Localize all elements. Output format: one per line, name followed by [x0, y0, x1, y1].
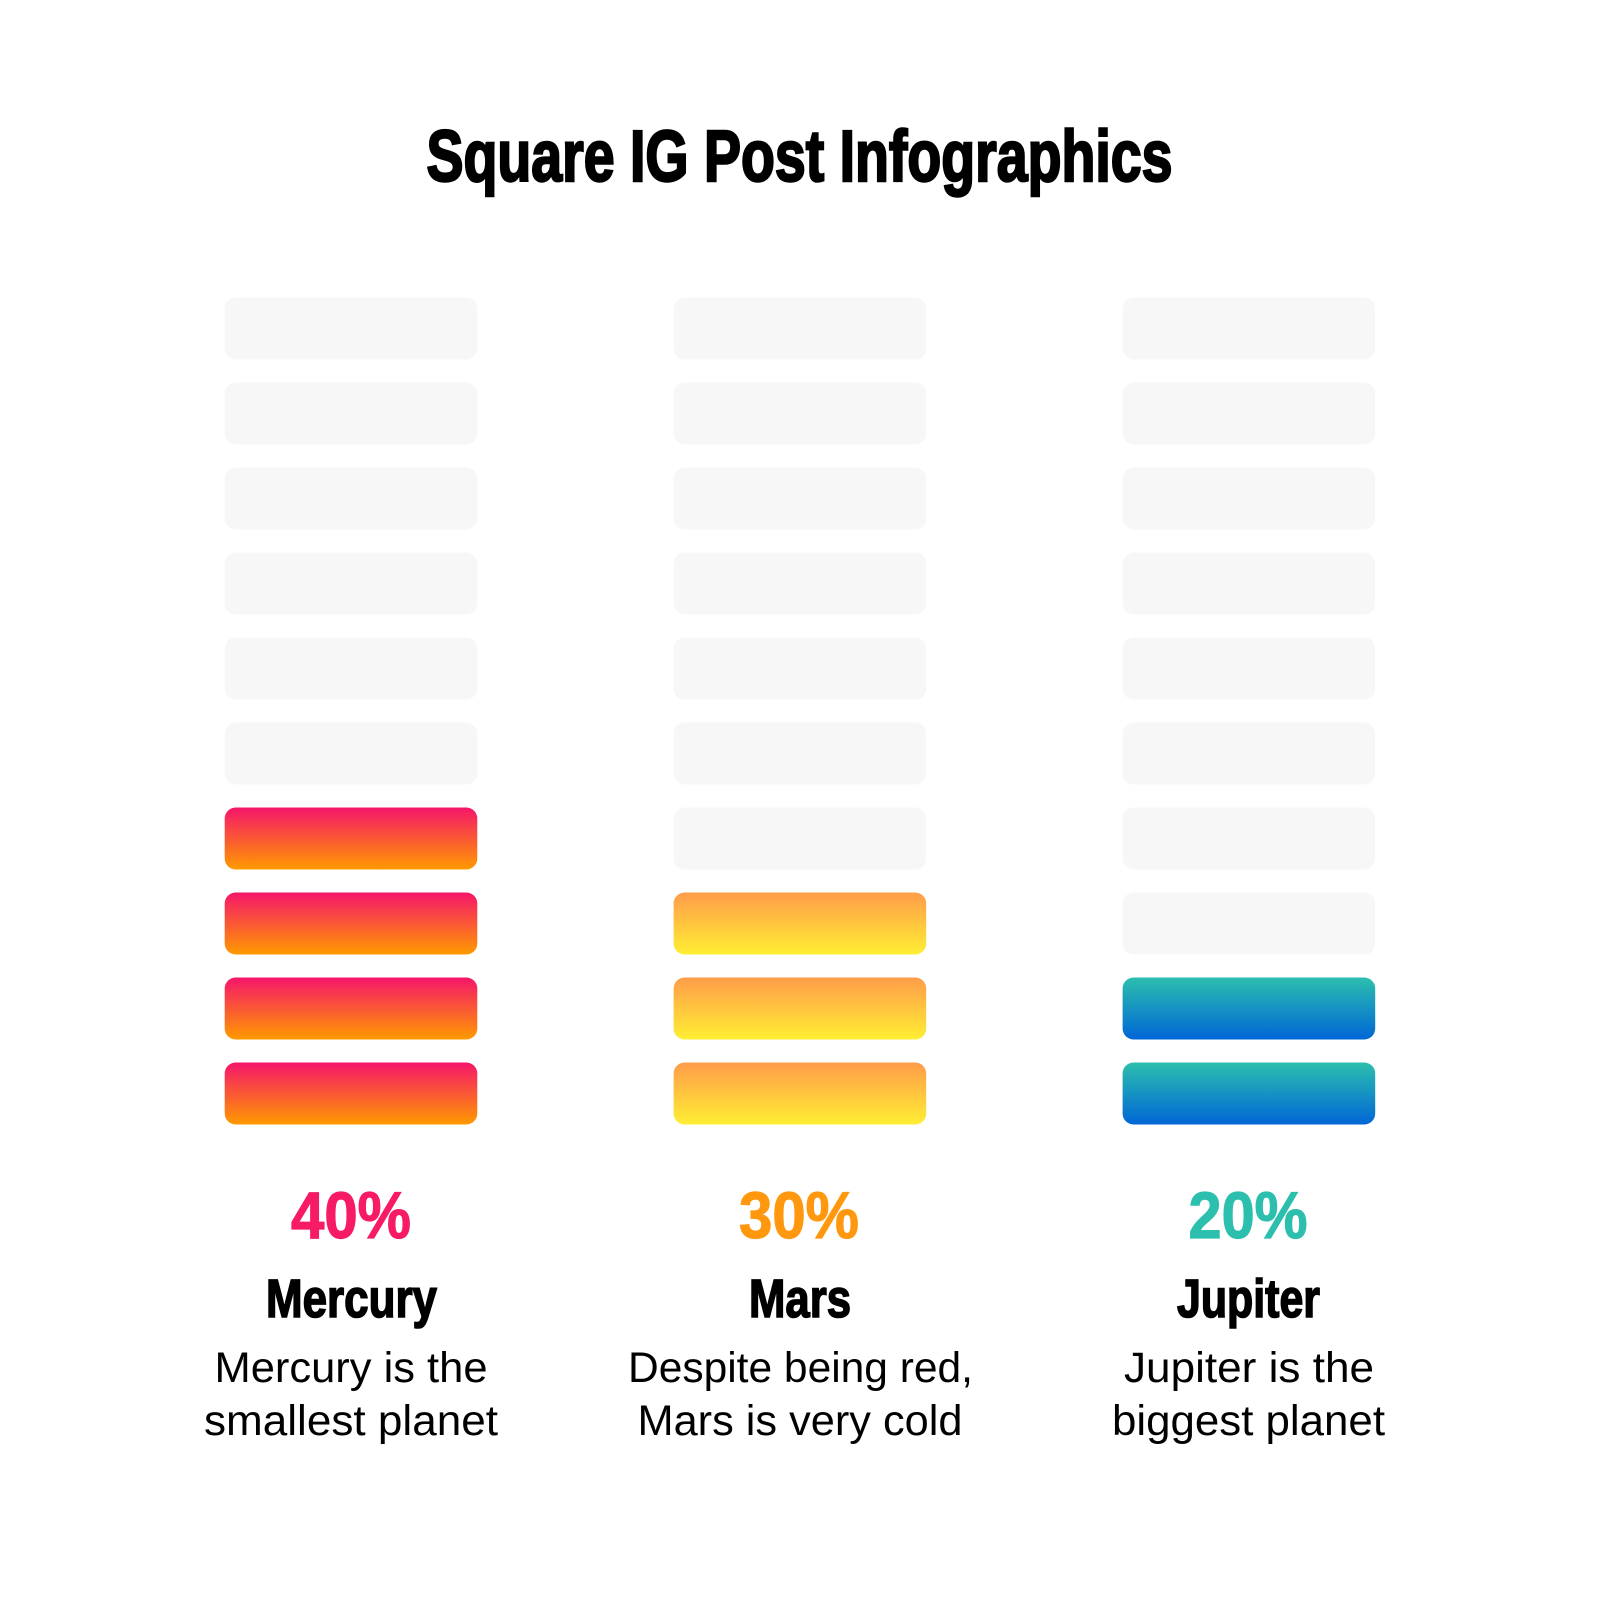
bar chart: Mars 30% — [674, 298, 926, 1124]
text block: Mercury description — [204, 1344, 498, 1445]
text block: Mars description: Despite being red, — [628, 1344, 973, 1392]
text block: Mars description — [628, 1344, 973, 1445]
bar chart: Jupiter 20% — [1123, 298, 1375, 1124]
heading: Mars: Mars — [749, 1269, 851, 1329]
bar chart: Mercury 40% — [225, 298, 477, 1124]
title: Square IG Post Infographics — [426, 117, 1172, 197]
text block: Mars description: Mars is very cold — [638, 1397, 962, 1445]
text block: Mercury description: Mercury is the — [214, 1344, 488, 1392]
text block: Jupiter description — [1112, 1344, 1385, 1445]
text block: Jupiter description: biggest planet — [1112, 1397, 1385, 1445]
text block: Mercury description: smallest planet — [204, 1397, 498, 1445]
heading: Mercury: Mercury — [266, 1269, 437, 1329]
percentage: 40%: 40% — [291, 1178, 411, 1252]
percentage: 30%: 30% — [739, 1178, 859, 1252]
text block: Jupiter description: Jupiter is the — [1124, 1344, 1374, 1392]
panel: Mercury — [204, 298, 498, 1445]
heading: Jupiter: Jupiter — [1177, 1269, 1320, 1329]
panel: Jupiter — [1112, 298, 1385, 1445]
panel: Mars — [628, 298, 973, 1445]
percentage: 20%: 20% — [1188, 1178, 1308, 1252]
